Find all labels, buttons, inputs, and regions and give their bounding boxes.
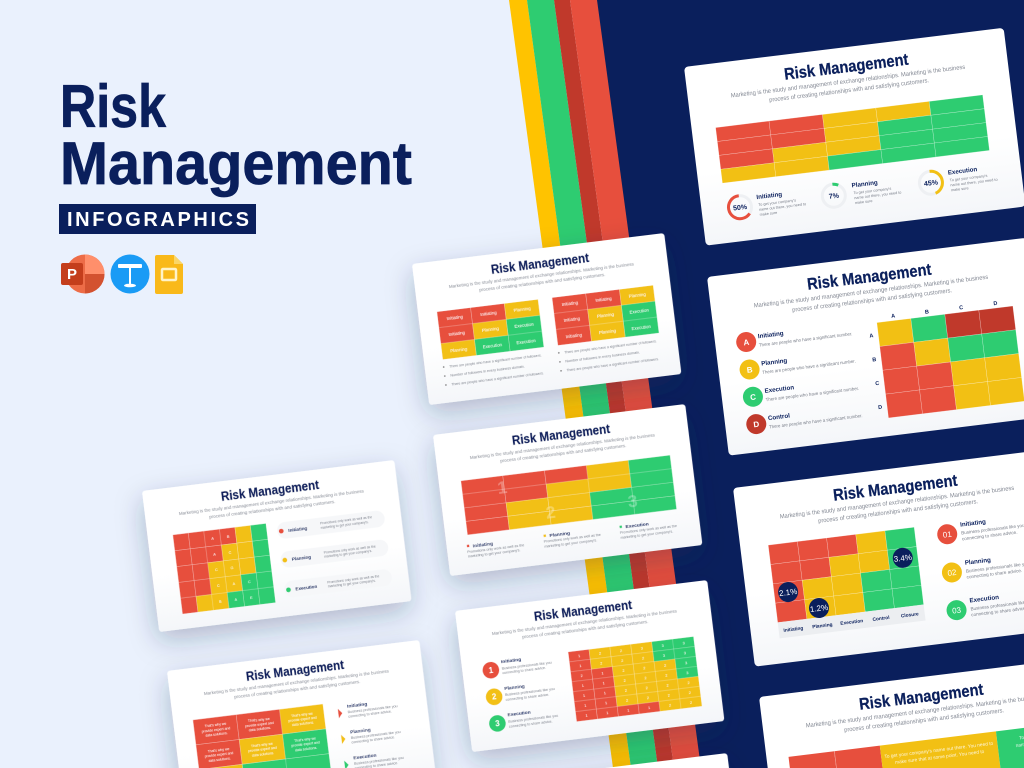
table: left: Planning	[482, 326, 500, 333]
chart: text matrix: provide expert and	[248, 746, 277, 753]
panel: heatmap with donuts	[684, 28, 1024, 246]
decorative stripes	[509, 0, 701, 768]
axis labels	[867, 301, 1009, 411]
chart: text cells: To get your company's name out there. You need to	[884, 741, 994, 760]
chart: numbered grid: 2	[599, 651, 601, 656]
table: right: Initiating	[595, 296, 613, 303]
legend: 3 execution: Business professionals like you	[508, 714, 558, 724]
chart: text matrix: data solutions.	[249, 726, 271, 733]
heading: Risk Management	[806, 261, 933, 294]
chart: numbered grid: 3	[682, 641, 685, 645]
legend: execution: marketing to get your company's.	[620, 529, 673, 540]
legend: 03: Execution	[969, 594, 1000, 604]
axis labels: B	[872, 357, 877, 363]
legend: 2 planning: connecting to share advice.	[505, 693, 550, 702]
heading: Risk Management	[245, 657, 345, 684]
legend: 1 initiating: connecting to share advice.	[502, 666, 546, 675]
donut: 7% planning: 7%	[828, 193, 840, 201]
axis bar: Planning	[812, 622, 833, 630]
marker: 3.4%: 3.4%	[893, 553, 912, 564]
marker: 1.2%	[808, 597, 830, 619]
heading: Risk Management	[783, 51, 910, 84]
chart: lettered grid	[173, 523, 276, 614]
axis bar	[778, 605, 926, 638]
chart: text cells	[789, 723, 1024, 768]
chart: risk grid	[716, 95, 989, 183]
chart: numbered grid: 2	[600, 661, 603, 666]
panel: table pair	[412, 233, 681, 405]
panel: numbered zones heatmap	[433, 404, 702, 576]
chart: numbered grid: 2	[622, 669, 625, 673]
text block: Marketing is the study and management of exchange relationships. Marketing is the business	[492, 608, 678, 637]
legend: execution: There are people who have a significant number.	[765, 386, 859, 402]
chart: numbered grid: 1	[584, 704, 587, 708]
chart: numbered grid: 1	[603, 681, 605, 685]
chart: numbered grid: 2	[647, 696, 649, 700]
chart: lettered grid: B	[219, 600, 222, 604]
chart: numbered grid: 1	[585, 714, 588, 718]
chart: numbered grid: 2	[669, 703, 671, 708]
chart: lettered grid: A	[232, 582, 236, 586]
chart: text matrix: provide expert and	[291, 741, 320, 748]
chart: text matrix: provide expert and	[245, 721, 274, 728]
chart: numbered grid: 3	[685, 661, 687, 665]
legend: execution	[619, 518, 678, 540]
label: execution: make sure	[951, 186, 969, 192]
heading: Risk Management	[220, 477, 320, 504]
text block: process of creating relationships with and satisfying customers.	[818, 498, 979, 525]
chart: numbered grid: 2	[666, 684, 669, 688]
chart: lettered grid: B	[227, 534, 230, 539]
chart: numbered grid: 3	[641, 646, 643, 651]
chart: lettered grid: C	[217, 584, 220, 588]
chart: text matrix: That's why we	[294, 736, 316, 743]
axis bar: Initiating	[783, 625, 804, 634]
axis labels: B	[925, 309, 929, 316]
chart: numbered grid: 2	[665, 674, 668, 678]
legend: 3 execution: 3	[495, 719, 501, 728]
text block: Marketing is the study and management of exchange relationships. Marketing is the business	[449, 261, 635, 290]
icon: Keynote	[110, 254, 150, 294]
chart: numbered grid: 2	[644, 676, 647, 680]
chart: text matrix: That's why we	[291, 711, 313, 718]
legend: 2 planning: Planning	[504, 684, 525, 692]
heading: Risk Management	[490, 250, 590, 277]
table: right	[552, 285, 659, 345]
chart: numbered grid: 1	[578, 654, 581, 658]
heading: Risk Management	[858, 681, 985, 714]
legend: control: Control	[768, 412, 791, 422]
legend: 02: 02	[947, 568, 957, 578]
infographics badge	[59, 204, 256, 234]
legend: 3 execution	[488, 707, 559, 733]
marker: 1.2%: 1.2%	[809, 603, 829, 614]
legend: planning	[738, 347, 856, 381]
legend: 01: Business professionals like you	[961, 523, 1024, 536]
navy panel	[590, 0, 1024, 768]
arrow legend: execution: Execution	[353, 753, 377, 761]
legend: 01: connecting to share advice.	[962, 530, 1018, 541]
chart: numbered grid: 2	[623, 679, 626, 683]
arrow legend: planning: Planning	[350, 727, 371, 736]
chart: text matrix: data solutions.	[252, 751, 274, 758]
chart: numbered grid: 2	[645, 686, 648, 690]
title: Management	[60, 130, 412, 197]
legend: control	[745, 401, 863, 435]
text block: process of creating relationships with and satisfying customers.	[500, 443, 627, 464]
pill: execution	[284, 569, 393, 598]
chart: text matrix: That's why we	[204, 722, 227, 729]
heading: Risk Management	[533, 597, 633, 624]
legend: control: There are people who have a significant number.	[769, 413, 863, 430]
table: left: Initiating	[446, 314, 464, 321]
legend: 2 planning: 2	[491, 692, 498, 702]
marker: 2.1%	[777, 581, 799, 603]
legend: 01: Initiating	[960, 518, 986, 529]
chart: lettered grid: C	[229, 551, 232, 555]
title: Risk	[60, 73, 167, 140]
pill: initiating: marketing to get your company's.	[320, 520, 369, 530]
label: planning	[851, 177, 902, 205]
legend: planning: Planning	[549, 531, 570, 539]
chart: matrix	[877, 306, 1024, 418]
chart: text matrix: provide expert and	[288, 716, 317, 723]
legend: 02	[941, 552, 1024, 584]
chart: numbered grid: 3	[686, 671, 689, 675]
chart: heatmap	[461, 455, 677, 535]
chart: numbered grid: 3	[684, 651, 686, 655]
text block: process of creating relationships with and satisfying customers.	[209, 499, 336, 520]
icon: PowerPoint: P	[67, 266, 77, 283]
chart: numbered grid: 1	[606, 711, 609, 715]
chart: numbered grid: 2	[625, 689, 627, 693]
arrow legend: initiating: connecting to share advice.	[348, 710, 392, 719]
text block: Marketing is the study and management of exchange relationships. Marketing is the business	[470, 432, 656, 461]
icon: Google Slides	[155, 255, 183, 294]
legend: 1 initiating: 1	[488, 666, 494, 675]
bullets: right: Number of followers in every business domain.	[565, 350, 640, 363]
chart: text matrix: That's why we	[248, 717, 270, 723]
chart: numbered grid: 3	[663, 654, 665, 658]
legend: initiating: A	[743, 338, 750, 347]
chart: numbered grid: 1	[604, 691, 606, 695]
table: right: Initiating	[563, 316, 581, 323]
chart: numbered grid: 1	[627, 709, 630, 713]
table: left: Execution	[516, 338, 536, 345]
legend: 2 planning: Business professionals like you	[505, 687, 555, 697]
legend: control: D	[753, 420, 760, 429]
legend: execution: Execution	[764, 384, 795, 395]
arrow legend: planning	[340, 723, 402, 746]
legend: initiating: marketing to get your company's.	[468, 548, 521, 559]
panel: text matrix with arrows	[167, 640, 436, 768]
legend: 3 execution: Execution	[507, 710, 531, 719]
chart: numbered grid: 2	[689, 691, 691, 695]
chart: text matrix: That's why we	[207, 747, 230, 754]
chart: lettered grid: C	[248, 580, 251, 584]
legend: 01	[936, 514, 1024, 545]
infographics badge: INFOGRAPHICS	[67, 209, 249, 231]
legend: 1 initiating: Initiating	[501, 657, 522, 665]
chart: numbered grid: 2	[687, 681, 690, 685]
panel: text heatmap (cropped)	[759, 658, 1024, 768]
donut: 45% execution: 45%	[924, 179, 939, 188]
label: execution	[947, 164, 998, 192]
text block: Marketing is the study and management of exchange relationships. Marketing is the business	[753, 274, 989, 309]
label: initiating: To get your company's	[758, 198, 796, 207]
pill: initiating: Promotions only work as well as the	[320, 515, 373, 526]
text block: Marketing is the study and management of exchange relationships. Marketing is the business	[179, 488, 365, 517]
donut: 45% execution	[918, 170, 944, 196]
arrow legend: initiating: Initiating	[347, 701, 368, 710]
chart: numbered grid: 1	[579, 664, 582, 668]
chart: lettered grid: A	[234, 598, 238, 602]
legend: initiating: Promotions only work as well as the	[467, 543, 524, 554]
text block: process of creating relationships with and satisfying customers.	[522, 619, 649, 640]
axis bar: Closure	[901, 611, 919, 619]
axis bar: Control	[872, 615, 890, 623]
table: left: Planning	[450, 346, 468, 353]
chart: numbered grid: 2	[621, 659, 624, 663]
table: right: Planning	[628, 292, 647, 299]
heading: Risk Management	[511, 421, 611, 448]
legend: planning: marketing to get your company's.	[544, 538, 597, 549]
pill: execution: marketing to get your company's.	[328, 579, 376, 589]
table: right: Execution	[631, 324, 652, 331]
chart: lettered grid: A	[213, 552, 217, 557]
chart: text matrix: data solutions.	[208, 756, 231, 763]
axis labels: C	[959, 305, 964, 311]
chart: lettered grid: E	[250, 596, 253, 600]
legend: initiating: Initiating	[758, 330, 784, 340]
legend: execution	[742, 374, 860, 408]
marker: 3.4%	[892, 547, 914, 569]
legend: 02: connecting to share advice.	[966, 568, 1022, 580]
label: execution: To get your company's	[950, 174, 988, 182]
bullets: left	[443, 353, 544, 387]
chart: lettered grid: C	[215, 568, 218, 572]
chart: heatmap: 2	[545, 502, 557, 523]
text block: process of creating relationships with and satisfying customers.	[479, 272, 606, 293]
arrow legend: execution	[344, 749, 405, 768]
pill: initiating	[276, 510, 386, 539]
legend: execution: C	[750, 392, 757, 402]
chart: numbered grid: 2	[643, 666, 646, 670]
axis bar: Execution	[840, 618, 864, 627]
chart: heatmap: 1	[496, 477, 509, 498]
legend: execution: Execution	[625, 521, 649, 530]
panel: lettered grid with pills	[142, 460, 411, 632]
table: right: Execution	[629, 308, 650, 315]
axis labels: D	[993, 301, 998, 307]
table: right: Planning	[599, 328, 617, 335]
legend: planning: Planning	[761, 357, 788, 368]
table: left: Execution	[514, 322, 535, 329]
chart: numbered grid: 2	[620, 649, 622, 653]
chart: numbered grid: 1	[601, 671, 604, 676]
chart: numbered grid: 2	[668, 693, 670, 698]
panel: ABCD matrix	[707, 238, 1024, 456]
legend: planning	[543, 527, 602, 549]
pill: planning: Planning	[292, 554, 312, 562]
chart: numbered grid: 1	[582, 684, 584, 688]
panel: bottom cropped card	[475, 753, 744, 768]
legend: planning: Promotions only work as well as the	[544, 533, 601, 544]
axis labels: A	[891, 313, 896, 320]
chart: lettered grid: A	[211, 536, 215, 541]
legend: 03: 03	[952, 606, 962, 616]
donut: 50% initiating	[722, 189, 758, 225]
table: left: Planning	[513, 306, 531, 313]
pill: execution: Promotions only work as well as the	[327, 574, 380, 584]
chart: numbered grid: 1	[648, 706, 650, 710]
text block: process of creating relationships with and satisfying customers.	[844, 707, 1005, 734]
label: planning: make sure	[855, 199, 873, 205]
chart: text matrix: That's why we	[251, 742, 273, 748]
label: initiating	[756, 188, 807, 217]
bullets: right: There are people who have a significant number of followers.	[564, 339, 657, 354]
chart: numbered grid	[568, 637, 702, 722]
table: left	[437, 299, 544, 360]
chart: numbered grid: 1	[605, 701, 608, 705]
label: execution: name out there, you need to	[950, 178, 998, 187]
chart: numbered grid: 2	[664, 664, 667, 668]
chart: numbered grid: 2	[642, 656, 644, 660]
table: left: Initiating	[448, 330, 466, 337]
text block: Marketing is the study and management of exchange relationships. Marketing is the business	[730, 64, 966, 99]
legend: planning: There are people who have a significant number.	[762, 359, 856, 375]
pill: planning: Promotions only work as well as the	[323, 544, 376, 555]
donut: 50% initiating: 50%	[733, 204, 748, 213]
arrow legend: planning: Business professionals like you	[351, 730, 401, 740]
legend: 1 initiating: Business professionals like you	[502, 661, 552, 671]
arrow legend: planning: connecting to share advice.	[351, 735, 395, 745]
bullets: left: Number of followers in every business domain.	[450, 364, 525, 378]
axis labels: A	[869, 333, 874, 340]
bullets: right	[558, 339, 659, 373]
chart: text matrix: provide expert and	[202, 726, 231, 734]
text block: process of creating relationships with and satisfying customers.	[234, 679, 361, 700]
chart: numbered grid: 2	[690, 701, 692, 705]
legend: 02: Planning	[964, 557, 991, 567]
table: right: Initiating	[561, 300, 579, 307]
arrow legend: initiating	[337, 698, 398, 720]
legend: planning: B	[746, 365, 753, 375]
pill: planning	[280, 539, 389, 568]
bullets: right: There are people who have a significant number of followers.	[566, 357, 659, 372]
legend: initiating	[735, 319, 853, 353]
chart: lettered grid: G	[230, 566, 234, 571]
chart: text matrix: data solutions.	[295, 746, 318, 752]
title	[60, 73, 412, 197]
legend: initiating: There are people who have a significant number.	[759, 331, 853, 348]
label: planning: name out there, you need to	[854, 190, 902, 200]
label: execution: Execution	[947, 166, 978, 177]
chart: text matrix	[193, 704, 332, 768]
label: initiating: name out there, you need to	[759, 202, 806, 212]
axis labels: C	[875, 381, 880, 387]
table: left: Execution	[482, 342, 503, 349]
label: planning: Planning	[851, 179, 878, 189]
chart: text matrix: provide expert and	[205, 751, 234, 759]
heading: Risk Management	[832, 472, 959, 505]
legend: 1 initiating	[482, 653, 553, 679]
label: initiating: Initiating	[756, 191, 783, 201]
pill: execution: Execution	[295, 584, 318, 592]
icon: PowerPoint	[61, 254, 104, 294]
chart: numbered grid: 2	[580, 674, 583, 678]
legend: initiating: Initiating	[473, 541, 493, 549]
arrow legend: initiating: Business professionals like you	[347, 704, 398, 714]
chart: text matrix: data solutions.	[205, 731, 228, 738]
legend: 03	[945, 590, 1024, 621]
bullets: left: There are people who have a significant number of followers.	[451, 371, 544, 387]
bullets: left: There are people who have a significant number of followers.	[449, 353, 542, 369]
label: planning: To get your company's	[853, 187, 892, 195]
chart: numbered grid: 2	[626, 699, 628, 703]
pill: planning: marketing to get your company's.	[324, 549, 373, 559]
legend: 01: 01	[942, 530, 953, 540]
chart: numbered grid: 1	[583, 694, 585, 698]
pill: initiating: Initiating	[288, 526, 308, 533]
chart: text matrix: data solutions.	[292, 721, 314, 727]
table: right: Initiating	[565, 332, 583, 339]
legend: execution: Promotions only work as well as the	[620, 524, 677, 535]
legend: initiating	[466, 537, 525, 559]
legend: 2 planning	[485, 680, 556, 706]
text block: process of creating relationships with and satisfying customers.	[792, 287, 953, 314]
arrow legend: execution: Business professionals like you	[354, 756, 404, 766]
legend: 3 execution: connecting to share advice.	[509, 719, 553, 729]
text block: process of creating relationships with and satisfying customers.	[769, 77, 930, 104]
table: right: Planning	[597, 312, 615, 319]
panel: numbered grid	[455, 580, 724, 752]
chart: heatmap: 3	[627, 491, 639, 512]
text block: Marketing is the study and management of exchange relationships. Marketing is the business	[204, 668, 390, 697]
donut: 7% planning	[821, 183, 847, 209]
marker: 2.1%: 2.1%	[779, 587, 798, 598]
axis labels: D	[878, 405, 883, 411]
table: left: Initiating	[480, 310, 497, 317]
panel: heatmap with percent markers	[733, 449, 1024, 667]
chart: heatmap	[768, 527, 924, 623]
label: initiating: make sure	[759, 211, 777, 217]
chart: numbered grid: 3	[661, 644, 664, 648]
chart: text cells: make sure that at some point. You need to	[895, 749, 985, 766]
